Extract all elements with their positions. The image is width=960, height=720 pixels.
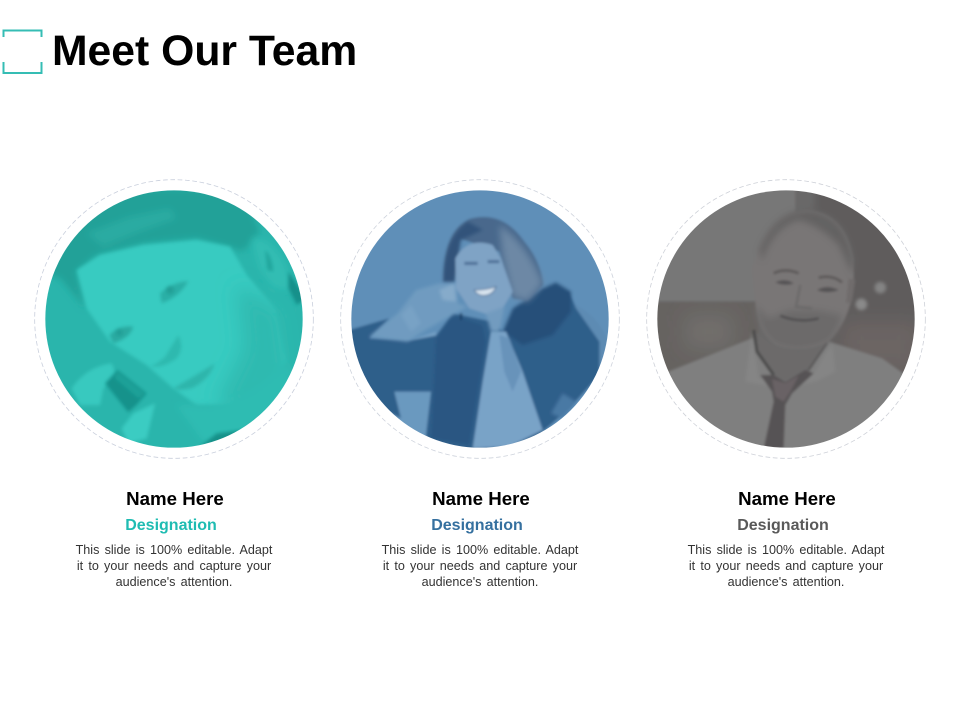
- counter background: [649, 302, 759, 376]
- portrait: grey man in tie: [646, 179, 926, 459]
- wall: [659, 190, 795, 301]
- forearm and hand: [369, 283, 468, 342]
- head: [755, 214, 854, 338]
- mouth: [780, 316, 819, 320]
- description: audience's attention.: [422, 575, 538, 589]
- mouth: [474, 287, 496, 296]
- card: third team member: [688, 488, 884, 589]
- description: [76, 543, 272, 589]
- tie: [760, 370, 814, 448]
- description: audience's attention.: [116, 575, 232, 589]
- hand: [72, 363, 116, 405]
- blouse: [473, 332, 543, 448]
- description: it to your needs and capture your: [383, 559, 577, 573]
- hair: [443, 217, 543, 301]
- name: Name Here: [738, 488, 836, 509]
- eyes: [464, 262, 499, 263]
- description: it to your needs and capture your: [77, 559, 271, 573]
- card: first team member: [76, 488, 272, 589]
- shirt: [668, 339, 903, 448]
- description: This slide is 100% editable. Adapt: [688, 543, 884, 557]
- earring: [458, 312, 464, 320]
- brows and eyes: [774, 270, 842, 282]
- ear: [848, 280, 852, 302]
- phone: [105, 370, 147, 412]
- face: [77, 240, 287, 405]
- scalp shadow: [760, 210, 853, 268]
- designation: Designation: [737, 517, 829, 534]
- neck: [756, 342, 822, 381]
- description: [382, 543, 578, 589]
- description: audience's attention.: [728, 575, 844, 589]
- description: This slide is 100% editable. Adapt: [76, 543, 272, 557]
- icon: title bracket: [2, 30, 42, 74]
- designation: Designation: [431, 517, 523, 534]
- nose: [796, 287, 800, 307]
- beard shadow: [760, 311, 838, 347]
- designation: Designation: [125, 517, 217, 534]
- nose: [154, 338, 182, 366]
- portrait: blue woman: [340, 179, 620, 459]
- mouth: [176, 365, 214, 390]
- light lower background: [395, 392, 430, 436]
- card: second team member: [382, 488, 578, 589]
- ear: [259, 245, 284, 284]
- title: Meet Our Team: [52, 27, 357, 75]
- hair: [52, 190, 260, 302]
- portrait: teal man on phone: [34, 179, 314, 459]
- description: [688, 543, 884, 589]
- name: Name Here: [432, 488, 530, 509]
- neck and chin: [177, 365, 297, 442]
- description: it to your needs and capture your: [689, 559, 883, 573]
- description: This slide is 100% editable. Adapt: [382, 543, 578, 557]
- jacket: [352, 296, 600, 448]
- right arm: [569, 302, 608, 382]
- name: Name Here: [126, 488, 224, 509]
- face and neck: [455, 243, 513, 315]
- eyes and brows: [160, 281, 188, 303]
